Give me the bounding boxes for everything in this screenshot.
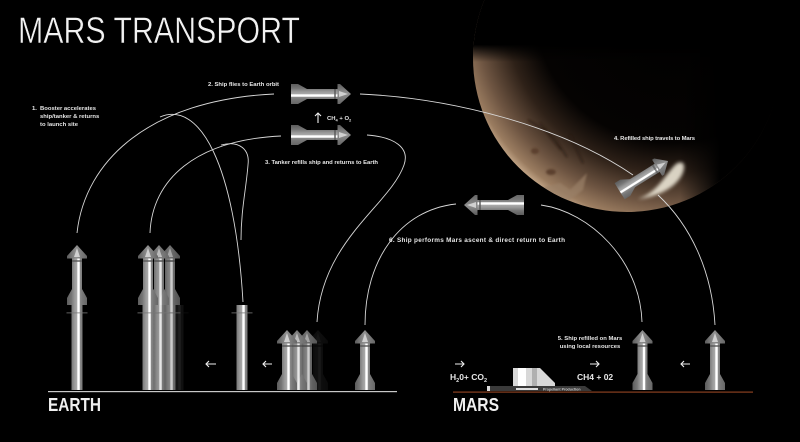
tanker in Earth orbit (291, 125, 351, 145)
input label: 2 (484, 378, 487, 384)
step 5 label: using local resources (560, 344, 621, 350)
step 2 label: 2. Ship flies to Earth orbit (208, 82, 279, 88)
input label: 2 (456, 378, 459, 384)
propellant transfer label: CH (327, 116, 336, 122)
ship on Earth (355, 330, 375, 390)
ship travelling to Mars (615, 153, 673, 199)
plant label: Propellant Production (543, 388, 581, 392)
step 5 label: 5. Ship refilled on Mars (558, 336, 622, 342)
step 1 label: to launch site (40, 122, 79, 128)
plume behind ship travelling to Mars (638, 162, 684, 199)
output label: CH4 + 02 (577, 372, 613, 382)
tanker ships on pad (277, 330, 328, 390)
propellant production plant (487, 368, 592, 392)
ship landed on Mars (705, 330, 725, 390)
Earth ground line (48, 391, 397, 392)
surface features (528, 120, 583, 163)
arrow (206, 361, 216, 367)
arrow (590, 361, 599, 367)
step 6 label: 6. Ship performs Mars ascent & direct return to Earth (389, 237, 565, 244)
title: MARS TRANSPORT (18, 10, 300, 51)
propellant transfer label: 2 (349, 118, 352, 122)
propellant transfer label: 4 (336, 118, 339, 122)
Mars ground line (453, 392, 753, 393)
arrow (455, 361, 464, 367)
input label: H (450, 372, 456, 382)
Earth label: EARTH (48, 395, 101, 415)
step 3 label: 3. Tanker refills ship and returns to Earth (265, 160, 378, 166)
arrow (681, 361, 690, 367)
trajectory arcs (77, 94, 715, 325)
propellant transfer label: + O (338, 116, 349, 122)
stacked tankers on pad (138, 245, 188, 390)
step 1 label: 1. (32, 106, 37, 112)
stacked ship and booster (66, 245, 88, 390)
step 1 label: ship/tanker & returns (40, 114, 100, 120)
planet: Mars (473, 0, 754, 212)
ship refilled on Mars (632, 330, 652, 390)
step 1 label: Booster accelerates (40, 106, 97, 112)
arrow (263, 361, 272, 367)
step 4 label: 4. Refilled ship travels to Mars (614, 136, 696, 142)
input label: 0+ CO (459, 372, 484, 382)
returned booster (232, 305, 252, 390)
return ship near Mars (464, 195, 524, 215)
ship in Earth orbit (291, 84, 351, 104)
propellant transfer arrow (315, 113, 321, 123)
Mars label: MARS (453, 395, 499, 415)
